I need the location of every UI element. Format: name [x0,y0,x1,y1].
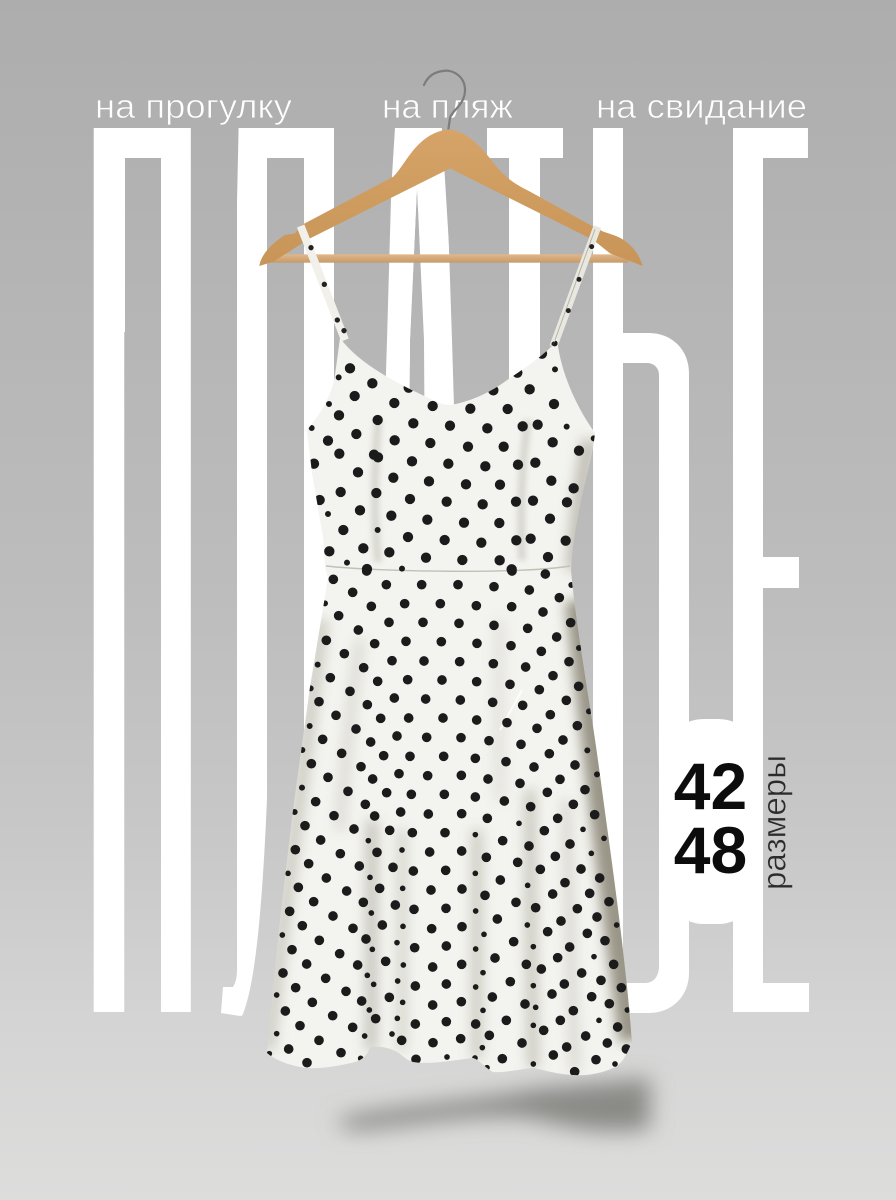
hanger wooden body [259,129,643,266]
polka dots [269,343,627,1072]
size numbers [674,749,747,887]
badge pill [662,719,760,924]
label: размеры: размеры [755,755,792,890]
size numbers: 48 [674,813,747,887]
label: на прогулку: на прогулку [95,88,292,126]
dress body [267,338,632,1075]
dots: lower skirt [269,823,627,1072]
hanger rod [270,254,628,263]
dress folds and shading [268,420,636,1070]
left strap [301,226,345,340]
label: на свидание: на свидание [596,88,807,126]
right strap [553,227,597,347]
floor shadow [335,1078,650,1131]
title: ПЛАТЬЕ [94,128,809,1016]
dots: bodice [312,343,594,569]
occasion labels [95,88,807,126]
dress [267,226,636,1075]
size badge [662,719,760,924]
label: на пляж: на пляж [382,88,513,126]
size numbers: 42 [674,749,747,823]
hanger [259,71,643,266]
hanger hook [424,71,465,132]
dots: upper skirt [295,571,597,818]
